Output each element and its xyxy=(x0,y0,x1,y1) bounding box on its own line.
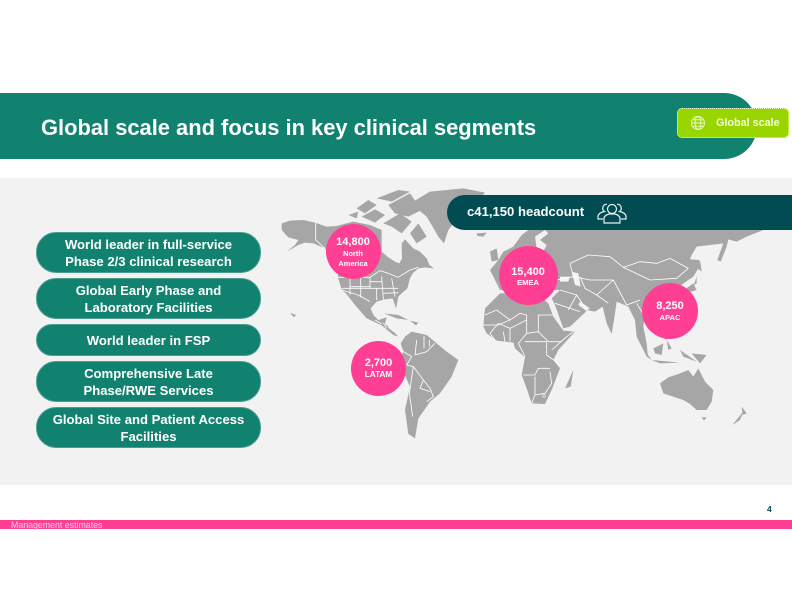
callout: LATAM xyxy=(351,341,406,396)
pill: late phase xyxy=(36,361,261,402)
panel: grey background xyxy=(0,178,792,485)
callout: EMEA xyxy=(498,246,558,305)
map: Americas xyxy=(282,188,487,438)
pill: full-service: World leader in full-service xyxy=(65,236,232,252)
footnote: Management estimates xyxy=(11,520,102,530)
badge label: Global scale xyxy=(716,117,780,129)
pill: early phase xyxy=(36,278,261,319)
callout: LATAM: 2,700 xyxy=(365,356,392,368)
pill: late phase: Comprehensive Late xyxy=(84,366,213,380)
callout: APAC: APAC xyxy=(660,312,680,322)
headcount bar xyxy=(447,195,792,230)
callout: EMEA: EMEA xyxy=(517,278,539,287)
title banner xyxy=(0,93,757,159)
pill: full-service: Phase 2/3 clinical research xyxy=(65,254,232,268)
pill: early phase: Global Early Phase and xyxy=(76,282,221,298)
callout: LATAM: LATAM xyxy=(365,370,392,378)
pill: full-service xyxy=(36,232,261,273)
callout: APAC: 8,250 xyxy=(656,300,684,312)
callout: North America: North xyxy=(343,249,363,258)
badge: Global scale xyxy=(677,108,789,138)
title: Global scale and focus in key clinical segments xyxy=(41,115,536,140)
callout: APAC xyxy=(642,283,698,339)
pill: site and patient access: Global Site and Patient Access xyxy=(53,412,244,426)
page number: 4 xyxy=(767,504,772,514)
pill: early phase: Laboratory Facilities xyxy=(84,300,213,314)
footer bar xyxy=(0,520,792,529)
map: Eurasia and Oceania xyxy=(490,230,763,425)
callout: North America xyxy=(326,224,380,278)
callout: North America: 14,800 xyxy=(336,236,370,248)
callout: North America: America xyxy=(338,258,368,268)
icon: globe xyxy=(691,116,705,130)
pill: late phase: Phase/RWE Services xyxy=(83,382,214,398)
callout: EMEA: 15,400 xyxy=(511,266,545,278)
pill: site and patient access xyxy=(36,407,261,448)
icon: people xyxy=(597,204,627,224)
pill: FSP xyxy=(36,324,261,356)
map: Africa xyxy=(483,293,575,404)
pill: FSP: World leader in FSP xyxy=(87,332,210,348)
headcount text: c41,150 headcount xyxy=(467,204,584,219)
pill: site and patient access: Facilities xyxy=(120,428,177,444)
